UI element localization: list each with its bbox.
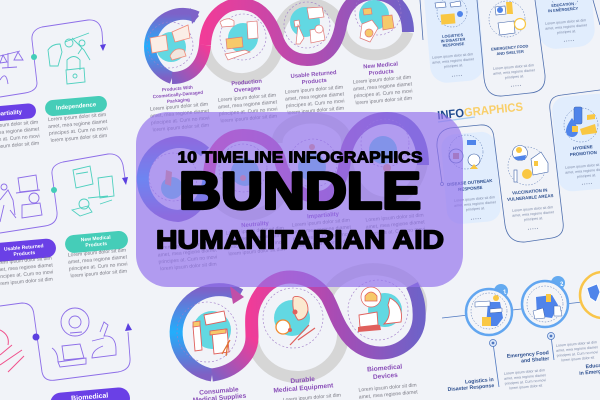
label: damaged packaging: Products With <box>162 85 193 92</box>
text: emergency description: principes at. Cum no movi <box>556 350 598 358</box>
text: logistics description: principes at. <box>444 63 463 69</box>
text: neutrality description <box>157 240 219 273</box>
text: independence description: amet, mea regione diamet <box>48 119 108 130</box>
badge 2: 2 <box>560 282 564 288</box>
arrow: new medical products <box>122 177 128 185</box>
text: emergency food description: principes at. <box>505 74 524 80</box>
text: new medical description: principes at. Cum no movi <box>354 88 413 100</box>
text: logistics description: lorem ipsum dolor sit <box>509 384 542 390</box>
icon: biomedical devices <box>348 280 408 340</box>
text: education description: principes at. <box>557 29 576 35</box>
label: logistics in disaster response: Logistics in <box>465 377 494 386</box>
label: education: IN EMERGENCY <box>548 6 579 13</box>
frame: independence connector <box>0 20 103 97</box>
text: third description: Lorem ipsum dolor sit dim <box>292 218 350 229</box>
heading line: 10 timeline infographics: 10 TIMELINE INFOGRAPHICS <box>178 150 422 166</box>
label: logistics in disaster response: Disaster Response <box>447 383 495 393</box>
text: fourth description: amet, mea regione diamet <box>366 219 426 231</box>
icon: education circle <box>580 272 600 318</box>
label: biomedical devices: Devices <box>373 372 398 381</box>
label: production overages <box>231 79 263 94</box>
text: usable description: Lorem ipsum dolor sit dim <box>285 85 343 96</box>
label: damaged packaging: Packaging <box>167 97 190 104</box>
label: emergency food: AND SHELTER <box>496 49 524 56</box>
text: logistics description: Lorem ipsum dolor sit dim <box>432 52 473 60</box>
pill: impartiality <box>0 103 37 124</box>
text: logistics description: principes at. Cum no movi <box>504 378 546 386</box>
text: production description: lorem ipsum dolor sit dim <box>220 114 277 124</box>
icon: logistics circle <box>466 289 512 335</box>
text: damaged packaging description: amet, mea regione diamet <box>150 108 210 120</box>
icon group: emergency food <box>489 1 526 37</box>
icon group: vaccination <box>508 146 548 185</box>
text: fourth description <box>365 212 426 238</box>
icon: consumable medical supplies <box>177 302 237 362</box>
label: hygiene: PROMOTION <box>570 150 597 157</box>
text: vaccination description: amet, mea regione diamet <box>512 210 554 218</box>
text: vaccination description: principes at. <box>524 216 543 222</box>
label: vaccination: VACCINATION IN <box>512 187 548 196</box>
heading line: humanitarian aid: HUMANITARIAN AID <box>156 226 444 254</box>
text: new medical description: lorem ipsum dolor sit dim <box>355 96 412 106</box>
pill: biomedical <box>49 387 131 400</box>
text: third description: lorem ipsum dolor sit dim <box>294 239 351 249</box>
badge 1: 1 <box>503 290 507 296</box>
badge 2 <box>551 276 565 290</box>
pill: usable returned products: Usable Returned <box>4 243 44 253</box>
text: logistics description: amet, mea regione diamet <box>432 57 474 65</box>
node 1 <box>490 340 496 346</box>
text: biomedical description: Lorem ipsum dolor sit dim <box>358 382 417 394</box>
text: emergency description: amet, mea regione diamet <box>556 345 598 353</box>
icon: damaged packaging <box>147 22 193 68</box>
text: impartiality description: Lorem ipsum dolor sit dim <box>226 226 284 237</box>
dot: biomedical <box>32 334 40 340</box>
icon: emergency food circle <box>522 281 568 327</box>
label: usable returned: Usable Returned <box>290 70 337 80</box>
text: third description: principes at. Cum no movi <box>292 231 352 243</box>
icon group: durable medical equipment <box>0 330 24 372</box>
icon: independence <box>289 139 337 187</box>
text: production description: amet, mea regione diamet <box>218 99 278 111</box>
label: disease outbreak: DISEASE OUTBREAK <box>447 178 493 187</box>
panel: bottom-right timeline <box>442 272 600 393</box>
text: fourth description: Lorem ipsum dolor sit dim <box>365 212 424 224</box>
banner: translucent purple panel <box>136 112 463 287</box>
label: disease outbreak <box>447 178 494 193</box>
arrow: biomedical <box>125 323 132 331</box>
gradient ribbon <box>176 277 419 375</box>
text: independence description: principes at. Cum no movi <box>49 126 108 137</box>
gradient ribbon <box>143 118 423 216</box>
label: new medical <box>363 61 399 77</box>
grey ribbon arcs <box>205 4 408 79</box>
text: hygiene description: principes at. <box>577 173 596 179</box>
heading: infographics: INFOGRAPHICS <box>437 100 524 122</box>
text: damaged packaging description: lorem ipsum dolor sit dim <box>152 123 209 133</box>
label: emergency food <box>491 43 529 57</box>
label: usable returned: Products <box>301 78 327 86</box>
label: consumable medical supplies: Consumable <box>199 386 239 397</box>
text: new medical description <box>352 74 414 107</box>
pill: independence <box>44 95 108 117</box>
text: damaged packaging description: principes at. Cum no movi <box>151 115 210 127</box>
label: biomedical devices <box>367 363 403 382</box>
dots: hygiene: • • • • • <box>582 181 593 186</box>
text: usable description: amet, mea regione diamet <box>285 91 345 103</box>
dots: education: • • • • • <box>564 38 575 43</box>
dots: disease: • • • • • <box>471 216 482 221</box>
label: durable medical equipment: Medical Equipment <box>273 382 334 395</box>
icon group: education <box>551 0 579 9</box>
text: damaged packaging description <box>149 101 211 134</box>
label: durable medical equipment: Durable <box>290 376 316 385</box>
text: independence description: Lorem ipsum dolor sit dim <box>48 112 106 123</box>
text: third description: amet, mea regione diamet <box>292 224 352 236</box>
icon: humanity <box>361 119 409 172</box>
text: usable description <box>284 84 346 117</box>
text: neutrality description: lorem ipsum dolor sit dim <box>160 261 217 272</box>
text: damaged packaging description: Lorem ipsum dolor sit dim <box>150 102 208 113</box>
text: logistics description <box>432 52 474 70</box>
dots: emergency food: • • • • • <box>511 83 522 88</box>
icon: usable returned <box>284 2 330 48</box>
text: usable description: lorem ipsum dolor sit dim <box>287 106 344 116</box>
dots: vaccination: • • • • • <box>528 226 539 231</box>
text: usable returned description <box>0 255 55 288</box>
text: hygiene description <box>565 162 600 180</box>
icon group: logistics <box>435 0 467 27</box>
pill: independence: Independence <box>56 102 97 112</box>
grey ribbon arcs <box>252 269 421 377</box>
text: new medical description: principes at. Cum no movi <box>69 261 128 273</box>
text: new medical description: Lorem ipsum dolor sit dim <box>68 248 126 259</box>
text: logistics description: amet, mea regione diamet <box>504 373 546 381</box>
panel: top ribbon timeline <box>147 0 414 134</box>
text: emergency description: Lorem ipsum dolor sit dim <box>556 340 597 348</box>
dots: logistics: • • • • • <box>452 73 463 78</box>
text: vaccination description: Lorem ipsum dolor sit dim <box>512 205 553 213</box>
title: bundle heading block <box>156 150 444 254</box>
text: impartiality description: amet, mea regione diamet <box>226 232 286 244</box>
text: disease description: Lorem ipsum dolor sit dim <box>454 195 495 203</box>
text: independence description <box>47 112 109 144</box>
text: production description <box>217 92 279 125</box>
text: impartiality description: principes at. Cum no movi <box>226 239 286 251</box>
pill: usable returned products <box>0 238 57 264</box>
arrow tail: ribbon start <box>190 8 199 24</box>
panel: left timeline sheet <box>0 20 132 400</box>
label: production overages: Production <box>231 79 263 87</box>
label: new medical: New Medical <box>363 61 399 71</box>
text: new medical description: lorem ipsum dolor sit dim <box>70 269 127 279</box>
label: logistics in disaster response <box>447 377 495 393</box>
text: impartiality description <box>0 119 41 152</box>
snake line: middle row <box>437 90 600 242</box>
panel: middle ribbon timeline <box>143 118 426 273</box>
text: impartiality description: lorem ipsum dolor sit dim <box>228 247 285 257</box>
label: education in emergency <box>578 362 600 377</box>
label: disease outbreak: RESPONSE <box>458 185 483 192</box>
pill: new medical products <box>64 230 129 254</box>
icon group: disease outbreak <box>449 135 483 169</box>
label: logistics <box>440 32 466 48</box>
arrow: independence <box>100 44 106 51</box>
text: neutrality description: amet, mea regione diamet <box>158 247 218 259</box>
text: disease description: amet, mea regione diamet <box>454 200 496 208</box>
label: logistics: IN DISASTER <box>441 36 466 44</box>
text: disease description <box>454 195 496 213</box>
label: hygiene: HYGIENE <box>573 144 593 151</box>
text: impartiality description <box>225 225 287 258</box>
heading underline <box>438 117 475 122</box>
label: production overages: Overages <box>234 86 261 94</box>
label: damaged packaging <box>152 84 204 105</box>
icon group: independence <box>48 33 90 84</box>
pill: new medical products: New Medical <box>81 235 112 243</box>
label: new medical: Products <box>368 69 394 77</box>
label: emergency food: EMERGENCY FOOD <box>491 43 529 52</box>
text: vaccination description <box>512 205 554 223</box>
icon group: biomedical devices <box>52 308 116 367</box>
panel: right card sheet <box>419 0 600 242</box>
label: logistics: RESPONSE <box>442 41 465 48</box>
label: hygiene <box>569 144 597 157</box>
text: biomedical description <box>358 382 419 400</box>
label: logistics: LOGISTICS <box>442 32 464 39</box>
icon: impartiality <box>219 144 267 192</box>
pill: new medical products: Products <box>85 241 108 249</box>
text: logistics description: Lorem ipsum dolor sit dim <box>504 368 545 376</box>
text: education description: amet, mea regione diamet <box>545 23 587 31</box>
label: vaccination <box>506 187 554 202</box>
card fill: hygiene <box>551 93 600 192</box>
text: emergency description: lorem ipsum dolor sit <box>561 356 594 362</box>
pill: usable returned products: Products <box>13 250 36 258</box>
node 2 <box>548 332 554 340</box>
text: third description <box>291 217 353 250</box>
node: snake line end <box>440 182 444 186</box>
text: emergency food description: Lorem ipsum dolor sit dim <box>493 63 534 71</box>
dot: independence <box>31 54 37 60</box>
icon: production overages <box>220 14 266 60</box>
text: new medical description: amet, mea regione diamet <box>68 254 128 266</box>
icon group: hygiene <box>564 107 598 142</box>
label: education: EDUCATION <box>551 1 574 8</box>
gradient ribbon <box>150 0 408 78</box>
snake line: top row <box>420 0 600 96</box>
label: emergency food and shelter: and Shelter <box>521 356 550 365</box>
label: neutrality: Neutrality <box>241 221 270 229</box>
label: education <box>548 1 579 13</box>
text: usable description: principes at. Cum no movi <box>286 98 345 110</box>
text: neutrality description: Lorem ipsum dolor sit dim <box>157 240 216 252</box>
label: emergency food and shelter: Emergency Food <box>507 350 549 360</box>
label: impartiality: Impartiality <box>307 212 340 220</box>
text: production description: Lorem ipsum dolor sit dim <box>218 93 276 104</box>
dot: new medical products <box>51 187 57 193</box>
arrow tail: bottom ribbon start <box>230 286 244 304</box>
label: biomedical devices: Biomedical <box>367 363 403 374</box>
icon group: impartiality scales <box>0 51 23 84</box>
icon group: usable returned products <box>0 175 42 222</box>
icon: new medical <box>355 0 401 42</box>
panel: bottom ribbon timeline <box>176 269 421 400</box>
grey ribbon arcs <box>209 118 423 215</box>
label: vaccination: VULNERABLE AREAS <box>507 193 554 202</box>
text: education description <box>545 18 587 36</box>
text: independence description: lorem ipsum dolor sit dim <box>50 133 107 144</box>
icon group: new medical products <box>72 166 114 216</box>
badge 1 <box>494 284 508 298</box>
label: consumable medical supplies <box>192 386 247 400</box>
text: new medical description <box>67 247 129 280</box>
text: new medical description: Lorem ipsum dolor sit dim <box>353 75 411 86</box>
text: new medical description: amet, mea regione diamet <box>353 81 413 93</box>
frame: biomedical connector <box>0 303 130 380</box>
icon: neutrality <box>149 153 197 201</box>
icon: durable medical equipment <box>263 288 323 348</box>
card fill: education <box>530 0 596 50</box>
label: damaged packaging: Cosmetically-Damaged <box>152 90 203 99</box>
text: fourth description: principes at. Cum no movi <box>366 226 425 238</box>
text: production description: principes at. Cum no movi <box>219 106 278 118</box>
frame: new medical products connector <box>0 154 125 233</box>
text: emergency description <box>556 340 599 363</box>
text: logistics description <box>504 368 547 391</box>
text: emergency food description: amet, mea regione diamet <box>493 68 535 76</box>
text: education description: Lorem ipsum dolor sit dim <box>545 18 586 26</box>
heading line: bundle: BUNDLE <box>179 162 421 220</box>
label: durable medical equipment <box>272 374 334 395</box>
stems <box>493 336 554 387</box>
timeline line <box>442 300 600 318</box>
text: neutrality description: principes at. Cum no movi <box>158 254 217 266</box>
card fill: disease outbreak <box>440 131 502 225</box>
label: usable returned <box>290 70 338 87</box>
text: disease description: principes at. <box>466 206 485 212</box>
label: emergency food and shelter <box>507 350 550 366</box>
text: emergency food description <box>493 63 535 81</box>
card fill: logistics <box>419 0 485 84</box>
